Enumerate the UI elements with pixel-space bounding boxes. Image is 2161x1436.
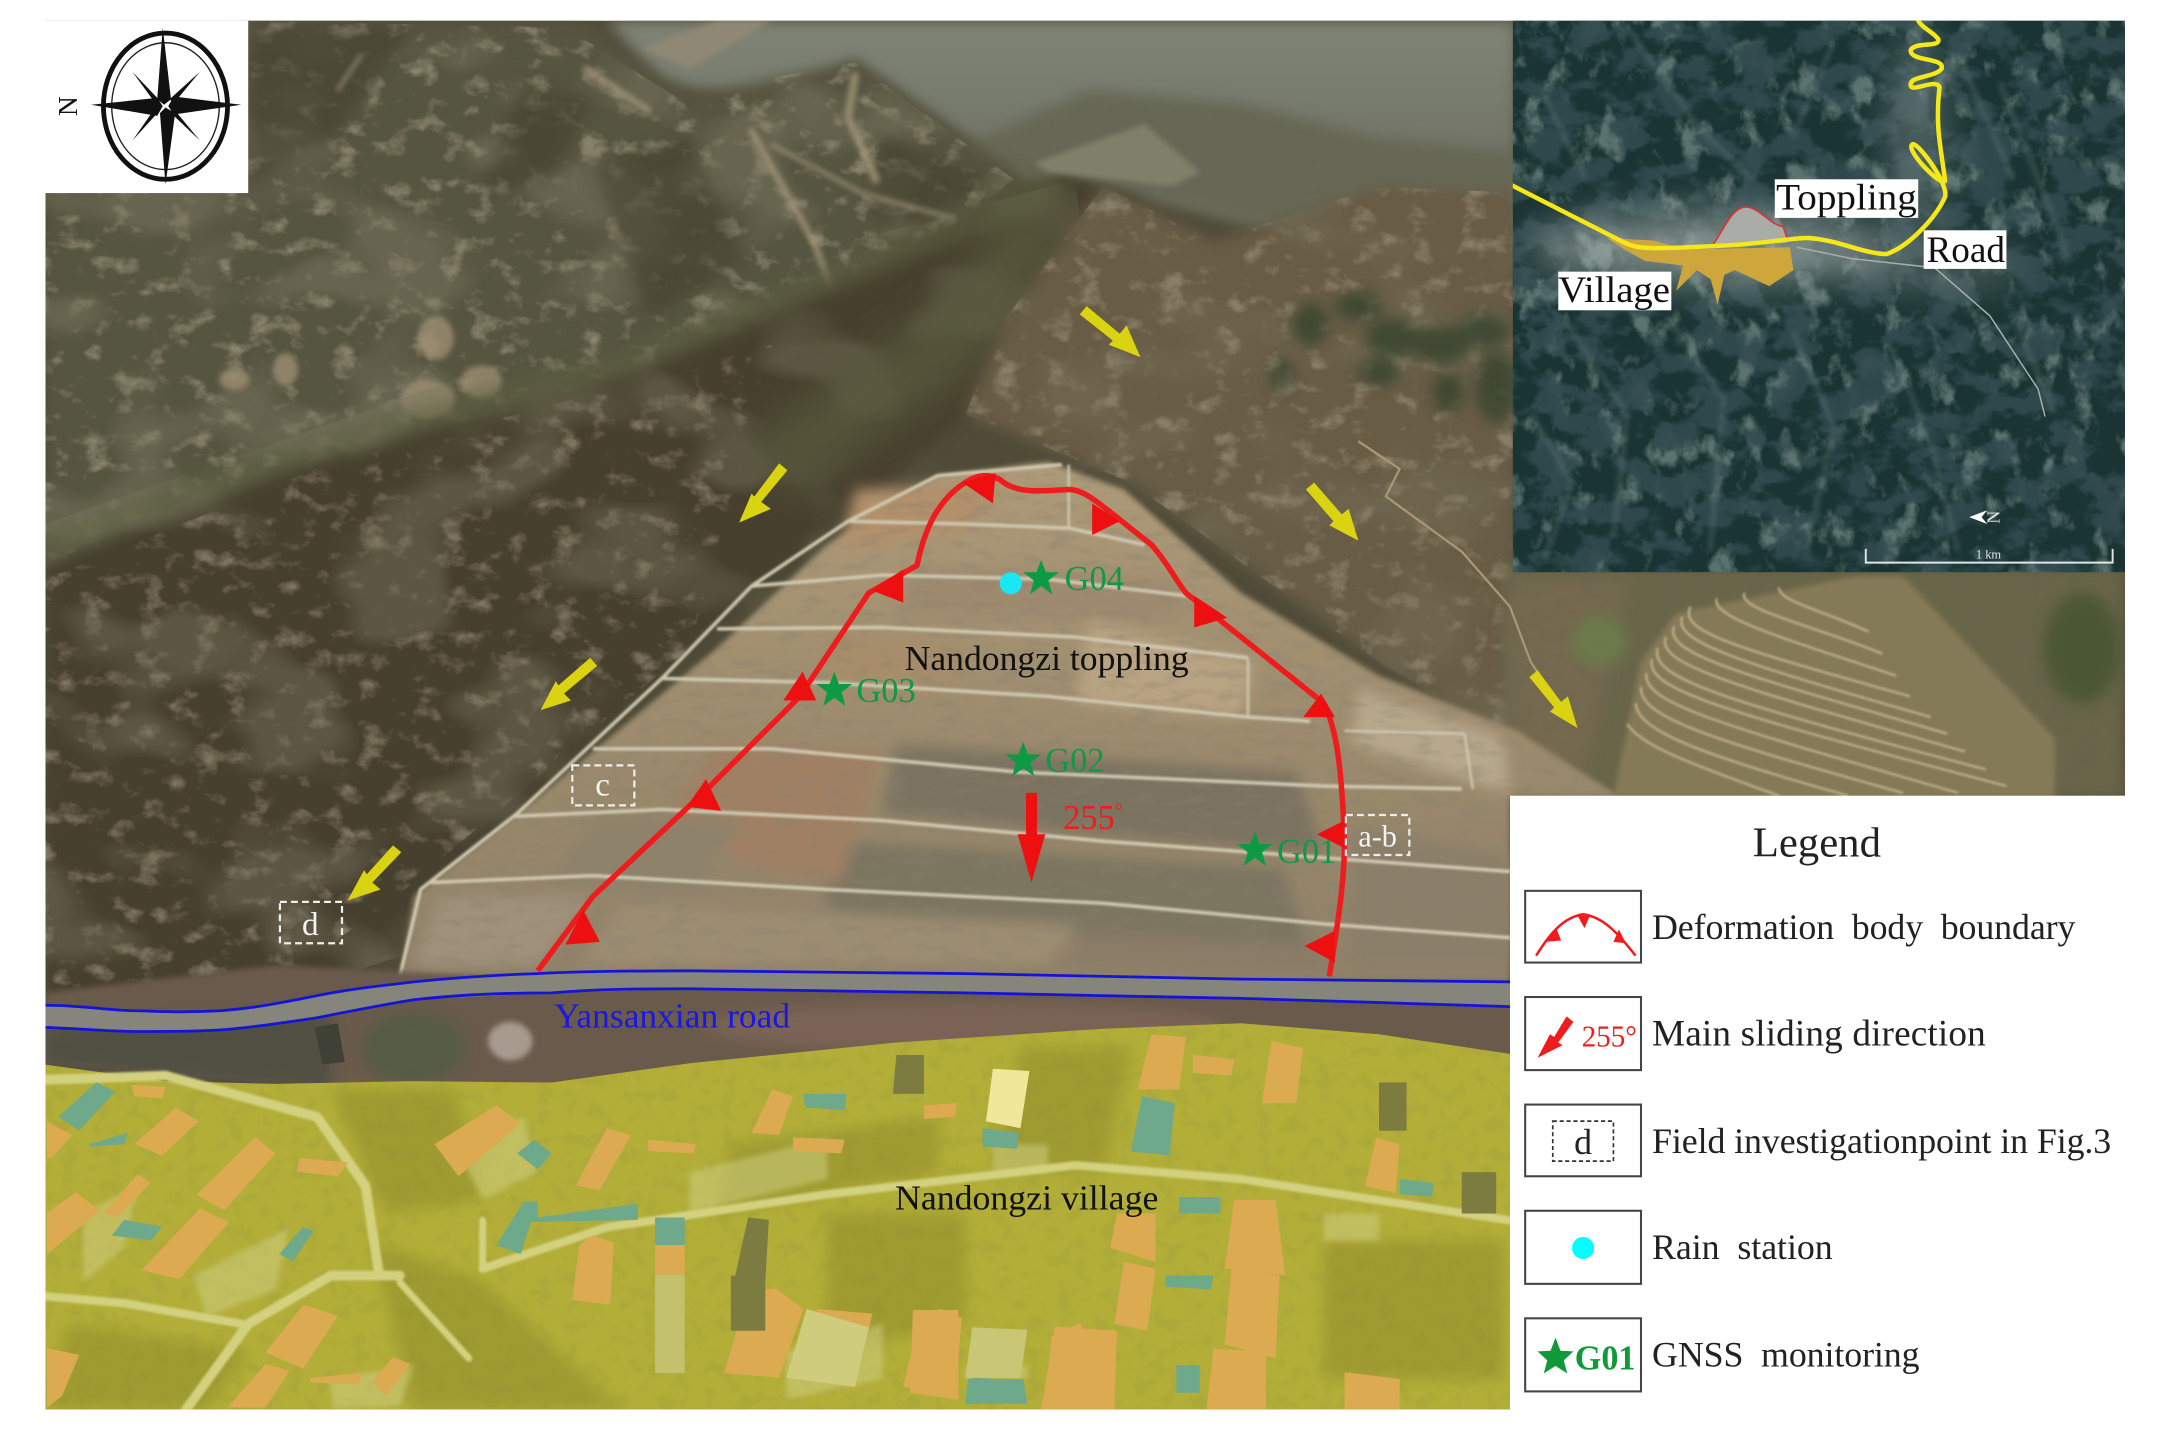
- yellow arrows: [348, 306, 1578, 900]
- legend item: sliding direction: [1525, 997, 1986, 1070]
- field point d: [280, 902, 342, 943]
- field point a-b: a-b: [1358, 820, 1397, 854]
- satellite inset map: [1512, 14, 2125, 572]
- upper left mountains: [52, 20, 1021, 500]
- right ridge: [965, 186, 1517, 745]
- sliding direction label: °: [1115, 800, 1123, 821]
- village label: Nandongzi village: [895, 1179, 1158, 1217]
- inset ridges: [1531, 28, 2068, 558]
- inset label toppling: Toppling: [1776, 178, 1917, 219]
- far terrace: [1034, 124, 1200, 186]
- GNSS G04: [1023, 560, 1124, 598]
- compass star: [91, 28, 241, 185]
- village buildings, left half: [47, 1055, 1081, 1407]
- inset yellow road: [1512, 14, 1945, 254]
- village buildings, right half: [910, 1034, 1400, 1409]
- inset village patch: [1607, 238, 1793, 304]
- terrace benches: [400, 465, 1510, 976]
- deformation body boundary: [538, 473, 1345, 976]
- legend item: boundary: [1525, 891, 2075, 963]
- legend item: field point: [1525, 1105, 2111, 1176]
- toppling outline: [1713, 207, 1789, 245]
- inset haze: [1531, 28, 2027, 288]
- sliding direction label: 255: [1063, 799, 1115, 837]
- legend item: boundary: Deformation body boundary: [1652, 907, 2075, 947]
- legend item: field point: d: [1574, 1122, 1592, 1162]
- legend title: Legend: [1753, 819, 1881, 866]
- legend item: GNSS monitoring: [1525, 1318, 1920, 1391]
- inset north marker: [1969, 510, 2004, 524]
- field point c: c: [595, 768, 610, 804]
- deforested slope: [400, 462, 1620, 982]
- rock boulders: [217, 314, 504, 462]
- village shaded yellow: [46, 1023, 1517, 1409]
- far slope shading on mountain faces: [248, 28, 993, 317]
- slope colour patches: [414, 483, 1510, 972]
- field point c: [572, 765, 634, 805]
- pine trees: [1271, 292, 1517, 422]
- legend panel: [1510, 796, 2161, 1436]
- village roads: [46, 1076, 1510, 1409]
- GNSS G04: G04: [1065, 560, 1124, 598]
- middle distance hills: [981, 86, 1510, 216]
- GNSS G03: [816, 672, 916, 710]
- lower right field: [1503, 565, 2125, 800]
- GNSS G02: [1005, 742, 1105, 780]
- north label: N: [52, 96, 83, 116]
- inset label road: Road: [1926, 230, 2005, 271]
- slope label: Nandongzi toppling: [905, 640, 1189, 678]
- GNSS G01: [1237, 832, 1336, 871]
- road surface: [46, 971, 1510, 1031]
- legend item: field point: Field investigationpoint in Fig.3: [1652, 1121, 2111, 1161]
- compass panel: [46, 21, 248, 193]
- pale rock scars: [338, 55, 952, 296]
- legend item: GNSS monitoring: G01: [1575, 1339, 1635, 1377]
- inset label village: Village: [1558, 270, 1670, 311]
- far pale scar: [641, 21, 772, 69]
- lower left mountain slope: [46, 172, 1145, 1004]
- legend item: rain station: Rain station: [1652, 1227, 1833, 1267]
- inset light road: [1797, 247, 2045, 417]
- inset scale bar: [1866, 547, 2113, 563]
- main sliding direction arrow: [1018, 793, 1045, 883]
- compass ring: [103, 33, 228, 179]
- legend item: sliding direction: 255°: [1582, 1020, 1637, 1054]
- inset north marker: N: [1984, 511, 2004, 524]
- field point d: d: [302, 907, 319, 943]
- green ridge band: [46, 186, 1062, 545]
- rain station: [1000, 572, 1022, 594]
- footpath: [1358, 440, 1538, 672]
- road edges in blue: [46, 971, 1510, 1031]
- field point a-b: [1346, 815, 1409, 855]
- inset features: [1512, 14, 2045, 417]
- ground between road and village: [46, 965, 1517, 1089]
- terraced field: [1613, 576, 2055, 797]
- legend item: GNSS monitoring: GNSS monitoring: [1652, 1335, 1920, 1375]
- compass inner ring: [112, 43, 219, 170]
- road label: Yansanxian road: [554, 997, 790, 1035]
- GNSS G02: G02: [1045, 742, 1105, 780]
- distant hazy hills: [606, 20, 1513, 228]
- inset scale bar: 1 km: [1976, 547, 2001, 561]
- GNSS G01: G01: [1277, 833, 1336, 871]
- legend item: rain station: [1525, 1211, 1833, 1284]
- legend item: sliding direction: Main sliding direction: [1652, 1013, 1986, 1054]
- pale yards: [83, 1117, 1379, 1409]
- GNSS G03: G03: [856, 672, 916, 710]
